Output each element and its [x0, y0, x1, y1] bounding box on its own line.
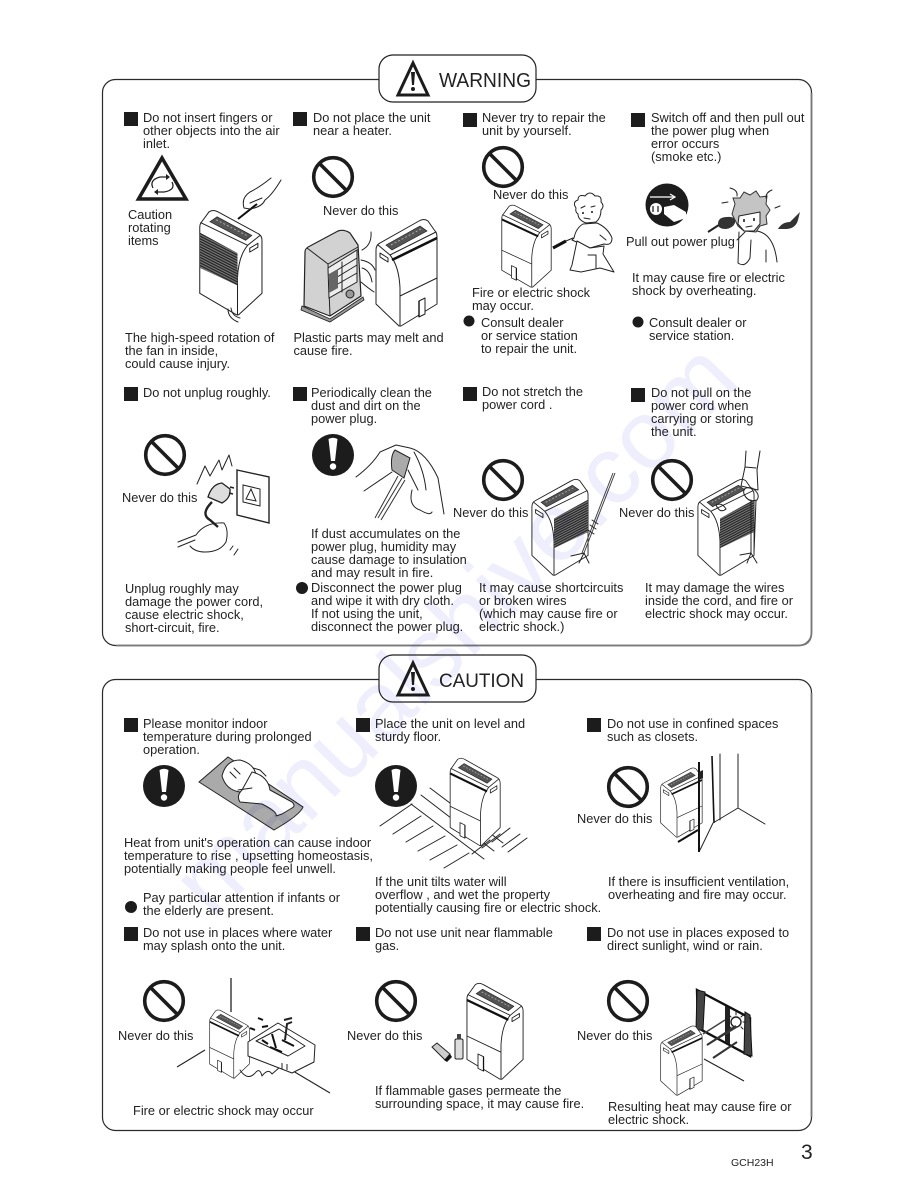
item: water splash: may splash onto the unit.: [143, 938, 285, 953]
bullet: disconnect the plug: If not using the unit,: [311, 606, 423, 621]
bullet: disconnect the plug: [296, 580, 463, 634]
bullet: consult dealer or service station: service station.: [649, 328, 734, 343]
icon: pull out plug: [646, 184, 688, 226]
item: switch off and pull plug: shock by overheating.: [632, 283, 756, 298]
icon: prohibited: [609, 768, 647, 806]
item: level and sturdy floor: potentially causing fire or electric shock.: [375, 900, 601, 915]
item: do not pull on cord: the unit.: [651, 424, 697, 439]
item: do not unplug roughly: [122, 385, 271, 635]
illustration: pulling plug from socket: [178, 455, 269, 555]
item: periodically clean plug: Periodically clean the: [311, 385, 432, 400]
item: monitor indoor temperature: [124, 716, 373, 918]
icon: rotating items triangle: [138, 158, 186, 199]
item: do not place near heater: Do not place the unit: [313, 110, 431, 125]
item: flammable gas: Do not use unit near flammable: [375, 925, 553, 940]
illustration: unit in closet: [661, 754, 765, 852]
icon: mandatory: [143, 765, 185, 807]
item: switch off and pull plug: It may cause fire or electric: [632, 270, 786, 285]
bullet: consult dealer: or service station: [481, 328, 578, 343]
heading: warning: [379, 55, 536, 102]
item: do not insert fingers: Caution: [128, 207, 172, 222]
item: do not pull on cord: electric shock may occur.: [645, 606, 788, 621]
item: do not unplug roughly: short-circuit, fire.: [125, 620, 220, 635]
item: switch off and pull plug: Switch off and then pull out: [651, 110, 805, 125]
icon: mandatory: [312, 434, 354, 476]
item: do not insert fingers: rotating: [128, 220, 171, 235]
illustration: unit on floor grid: [380, 758, 527, 868]
item: confined spaces: overheating and fire may occur.: [608, 887, 787, 902]
illustration: baby on mat: [199, 757, 303, 830]
icon: prohibited: [653, 461, 691, 499]
illustration: unit with stretched cord: [532, 473, 615, 575]
illustration: unit and boy with screwdriver: [502, 193, 614, 287]
heading: warning: WARNING: [439, 70, 531, 92]
item: do not stretch cord: Never do this: [453, 505, 528, 520]
item: do not place near heater: near a heater.: [313, 123, 392, 138]
item: confined spaces: such as closets.: [607, 729, 698, 744]
item: periodically clean plug: dust and dirt on the: [311, 398, 421, 413]
item: do not stretch cord: electric shock.): [479, 619, 564, 634]
item: switch off and pull plug: (smoke etc.): [651, 149, 721, 164]
illustration: unit carried by cord: [698, 451, 760, 575]
footer: page number: 3: [801, 1141, 813, 1164]
bullet: consult dealer: [464, 315, 578, 356]
item: never try to repair: Fire or electric shock: [472, 285, 591, 300]
panel: caution: [102, 655, 812, 1130]
icon: mandatory: [375, 765, 417, 807]
item: periodically clean plug: and may result in fire.: [311, 565, 433, 580]
bullet: consult dealer or service station: [632, 315, 747, 343]
item: do not pull on cord: Never do this: [619, 505, 694, 520]
watermark: manualshive.com: [150, 321, 757, 936]
item: confined spaces: Never do this: [577, 811, 652, 826]
item: level and sturdy floor: If the unit tilts water will: [375, 874, 507, 889]
item: level and sturdy floor: sturdy floor.: [375, 729, 441, 744]
illustration: person with smoke: [708, 188, 800, 265]
icon: prohibited: [484, 148, 522, 186]
bullet: consult dealer: to repair the unit.: [481, 341, 577, 356]
item: do not pull on cord: carrying or storing: [651, 411, 753, 426]
item: monitor indoor temperature: potentially making people feel unwell.: [124, 861, 336, 876]
item: never try to repair: may occur.: [472, 298, 534, 313]
item: flammable gas: If flammable gases permeate the: [375, 1083, 561, 1098]
item: do not place near heater: cause fire.: [294, 343, 353, 358]
item: do not pull on cord: inside the cord, and fire or: [645, 593, 794, 608]
item: sunlight wind rain: direct sunlight, wind or rain.: [607, 938, 763, 953]
item: confined spaces: Do not use in confined spaces: [607, 716, 778, 731]
bullet: consult dealer or service station: Consult dealer or: [649, 315, 747, 330]
item: switch off and pull plug: Pull out power plug: [626, 234, 735, 249]
item: do not insert fingers: could cause injury.: [125, 356, 230, 371]
bullet: disconnect the plug: disconnect the power plug.: [311, 619, 463, 634]
heading: caution: CAUTION: [439, 670, 524, 692]
illustration: unit with gas cans: [432, 983, 523, 1079]
item: water splash: Never do this: [118, 1028, 193, 1043]
item: water splash: [118, 925, 333, 1118]
item: do not insert fingers: inlet.: [143, 136, 170, 151]
item: do not pull on cord: Do not pull on the: [651, 385, 751, 400]
item: flammable gas: [347, 925, 584, 1111]
item: monitor indoor temperature: Heat from unit's operation can cause indoor: [124, 835, 372, 850]
bullet: disconnect the plug: and wipe it with dry cloth.: [311, 593, 454, 608]
warning frame: [102, 80, 812, 646]
item: do not pull on cord: It may damage the wires: [645, 580, 784, 595]
item: water splash: Fire or electric shock may occur: [133, 1103, 314, 1118]
item: level and sturdy floor: [356, 716, 601, 915]
item: monitor indoor temperature: Please monitor indoor: [143, 716, 268, 731]
item: sunlight wind rain: electric shock.: [608, 1112, 689, 1127]
item: switch off and pull plug: [626, 110, 805, 343]
item: do not stretch cord: power cord .: [482, 397, 552, 412]
icon: prohibited: [484, 461, 522, 499]
item: do not stretch cord: (which may cause fire or: [479, 606, 618, 621]
item: do not insert fingers: The high-speed rotation of: [125, 330, 275, 345]
item: periodically clean plug: [293, 385, 467, 634]
item: never try to repair: Never try to repair the: [482, 110, 606, 125]
illustration: unit with finger: [200, 178, 281, 322]
item: flammable gas: Never do this: [347, 1028, 422, 1043]
icon: prohibited: [314, 158, 352, 196]
caution frame: [102, 680, 812, 1130]
panel: warning: [102, 55, 812, 646]
item: monitor indoor temperature: temperature to rise , upsetting homeostasis,: [124, 848, 373, 863]
bullet: consult dealer: Consult dealer: [481, 315, 564, 330]
item: do not insert fingers: [124, 110, 281, 371]
item: sunlight wind rain: Never do this: [577, 1028, 652, 1043]
item: switch off and pull plug: the power plug when: [651, 123, 769, 138]
item: do not unplug roughly: Unplug roughly may: [125, 581, 239, 596]
item: do not stretch cord: [453, 384, 623, 634]
illustration: heater and unit: [301, 220, 437, 326]
item: do not place near heater: [293, 110, 444, 358]
bullet: infants or elderly: [125, 890, 341, 918]
item: periodically clean plug: If dust accumulates on the: [311, 526, 460, 541]
item: monitor indoor temperature: operation.: [143, 742, 200, 757]
item: do not stretch cord: It may cause shortcircuits: [479, 580, 623, 595]
item: do not stretch cord: Do not stretch the: [482, 384, 583, 399]
footer: model code: GCH23H: [731, 1157, 774, 1169]
item: periodically clean plug: power plug.: [311, 411, 377, 426]
item: water splash: Do not use in places where water: [143, 925, 333, 940]
item: monitor indoor temperature: temperature during prolonged: [143, 729, 312, 744]
item: confined spaces: If there is insufficient ventilation,: [608, 874, 789, 889]
item: do not pull on cord: power cord when: [651, 398, 748, 413]
bullet: infants or elderly: Pay particular attention if infants or: [143, 890, 341, 905]
item: do not insert fingers: Do not insert fingers or: [143, 110, 273, 125]
item: do not unplug roughly: Do not unplug roughly.: [143, 385, 271, 400]
item: confined spaces: [577, 716, 789, 902]
item: do not unplug roughly: cause electric shock,: [125, 607, 244, 622]
item: flammable gas: gas.: [375, 938, 399, 953]
item: do not insert fingers: items: [128, 233, 159, 248]
item: do not unplug roughly: damage the power cord,: [125, 594, 263, 609]
heading: caution: [379, 655, 536, 702]
item: sunlight wind rain: Do not use in places exposed to: [607, 925, 789, 940]
bullet: infants or elderly: the elderly are present.: [143, 903, 274, 918]
item: do not place near heater: Never do this: [323, 203, 398, 218]
item: level and sturdy floor: Place the unit on level and: [375, 716, 525, 731]
item: do not place near heater: Plastic parts may melt and: [294, 330, 444, 345]
item: level and sturdy floor: overflow , and wet the property: [375, 887, 551, 902]
item: flammable gas: surrounding space, it may cause fire.: [375, 1096, 584, 1111]
icon: prohibited: [146, 436, 184, 474]
item: do not stretch cord: or broken wires: [479, 593, 566, 608]
illustration: wiping plug with cloth: [356, 445, 444, 520]
item: periodically clean plug: power plug, humidity may: [311, 539, 457, 554]
item: never try to repair: Never do this: [493, 187, 568, 202]
icon: prohibited: [377, 982, 415, 1020]
item: do not pull on cord: [619, 385, 794, 621]
item: switch off and pull plug: error occurs: [651, 136, 719, 151]
item: do not unplug roughly: Never do this: [122, 490, 197, 505]
illustration: unit near sunny window: [661, 990, 752, 1095]
item: sunlight wind rain: [577, 925, 792, 1127]
item: sunlight wind rain: Resulting heat may cause fire or: [608, 1099, 792, 1114]
item: do not insert fingers: the fan in inside,: [125, 343, 218, 358]
bullet: disconnect the plug: Disconnect the power plug: [311, 580, 462, 595]
item: do not insert fingers: other objects into the air: [143, 123, 280, 138]
item: never try to repair: unit by yourself.: [482, 123, 572, 138]
icon: prohibited: [145, 982, 183, 1020]
item: never try to repair: [463, 110, 614, 356]
icon: prohibited: [609, 982, 647, 1020]
item: periodically clean plug: cause damage to insulation: [311, 552, 467, 567]
illustration: unit next to sink: [177, 978, 330, 1093]
